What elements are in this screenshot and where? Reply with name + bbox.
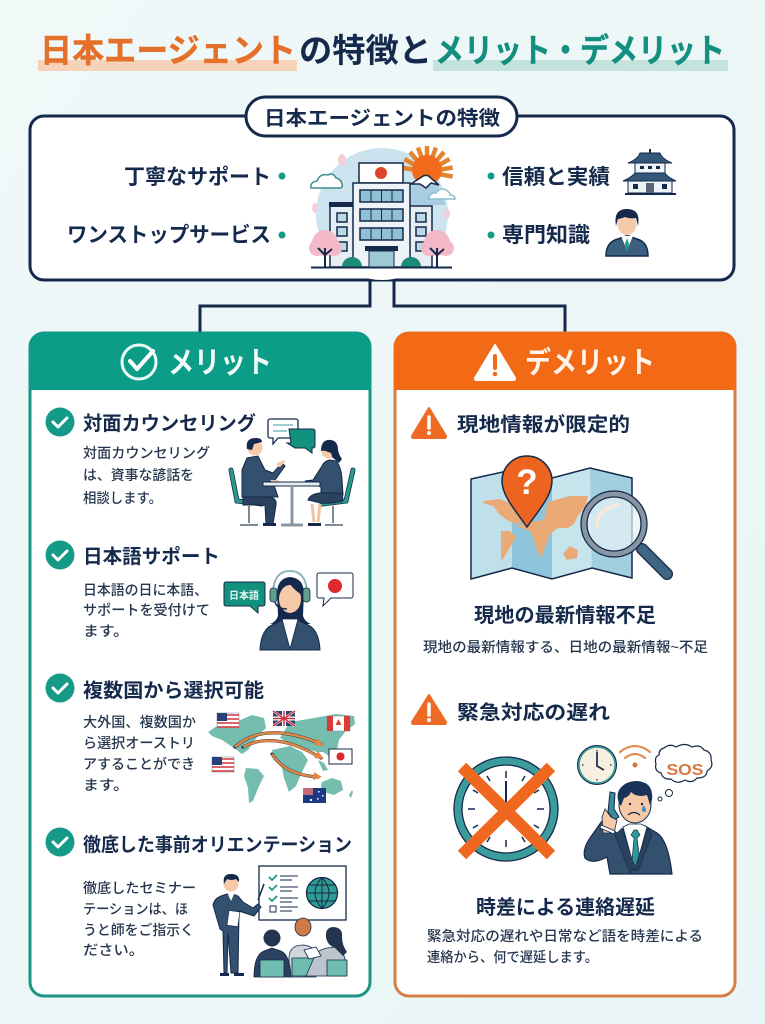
icon: orientation seminar [213, 866, 347, 977]
panel: メリット [29, 332, 371, 996]
text: 現地の最新情報不足 [423, 604, 708, 655]
text: 時差による連絡遅延: 時差による連絡遅延 [476, 895, 655, 919]
panel header: メリット [29, 332, 371, 390]
panel: デメリット [394, 332, 736, 996]
text: 時差による連絡遅延: 連絡から、何で遅延します。 [427, 949, 598, 965]
icon: Japanese castle [623, 149, 676, 194]
item: 日本語サポート: ます。 [83, 623, 129, 639]
icon: face-to-face counseling [231, 419, 353, 526]
feature: 専門知識: 専門知識 [502, 224, 590, 247]
item: 徹底した事前オリエンテーション: 徹底した事前オリエンテーション [83, 834, 352, 856]
item: 緊急対応の遅れ [412, 695, 610, 724]
icon: Japanese-support operator [224, 571, 353, 650]
icon: map with question pin and magnifier: ? [516, 463, 538, 502]
panel header: メリット: メリット [168, 347, 272, 380]
text: 時差による連絡遅延: 緊急対応の遅れや日常など語を時差による [427, 928, 703, 944]
panel header: デメリット [394, 332, 736, 390]
panel heading pill: 日本エージェントの特徴 [264, 107, 500, 130]
item: 日本語サポート: 日本語の日に本語、 [83, 582, 208, 598]
icon: businessman [606, 209, 648, 256]
connector lines [200, 280, 565, 333]
panel heading pill [246, 97, 517, 136]
item: 日本語サポート [46, 540, 220, 639]
title: の特徴と [299, 32, 432, 69]
panel header: デメリット: デメリット [525, 346, 655, 380]
title: メリット・デメリット [435, 32, 725, 69]
item: 日本語サポート: サポートを受付けて [83, 602, 210, 618]
item: 対面カウンセリング [46, 408, 256, 506]
panel: 日本エージェントの特徴 [30, 97, 734, 280]
icon: office building with Japanese flag, sun and Mt Fuji [309, 146, 455, 280]
icon: Japanese-support operator: 日本語 [229, 589, 259, 602]
item: 徹底した事前オリエンテーション [46, 828, 352, 958]
title [38, 32, 728, 71]
item: 対面カウンセリング: 対面カウンセリング [83, 412, 256, 435]
item: 徹底した事前オリエンテーション: 徹底したセミナー [83, 880, 196, 896]
item: 対面カウンセリング: 相談します。 [83, 490, 162, 506]
title: 日本エージェント [40, 32, 296, 69]
item: 対面カウンセリング: 対面カウンセリング [83, 445, 210, 461]
icon: worried businessman calling with SOS [578, 744, 712, 874]
item: 徹底した事前オリエンテーション: テーションは、ほ [83, 901, 188, 917]
item: 複数国から選択可能: アすることができ [83, 756, 195, 772]
item: 複数国から選択可能: 大外国、複数国か [83, 714, 196, 730]
item: 対面カウンセリング: は、資事な諺話を [83, 467, 194, 483]
item: 複数国から選択可能: 複数国から選択可能 [83, 680, 264, 702]
icon: worried businessman calling with SOS: SOS [666, 762, 704, 779]
feature: 丁寧なサポート: 丁寧なサポート [124, 166, 271, 189]
icon: world map with flags and arrows [208, 711, 355, 803]
feature: ワンストップサービス: ワンストップサービス [67, 224, 271, 247]
feature: 信頼と実績: 信頼と実績 [502, 166, 610, 189]
item: 日本語サポート: 日本語サポート [83, 546, 220, 568]
item: 徹底した事前オリエンテーション: うと師をご指示く [83, 922, 194, 938]
text: 現地の最新情報不足: 現地の最新情報する、日地の最新情報~不足 [423, 639, 708, 655]
text: 時差による連絡遅延 [427, 895, 703, 965]
text: 現地の最新情報不足: 現地の最新情報不足 [474, 604, 656, 627]
item: 徹底した事前オリエンテーション: ださい。 [83, 942, 144, 958]
icon: map with question pin and magnifier [471, 456, 667, 579]
item: 現地情報が限定的 [412, 408, 630, 438]
item: 緊急対応の遅れ: 緊急対応の遅れ [457, 701, 610, 724]
item: 複数国から選択可能 [46, 674, 264, 793]
item: 複数国から選択可能: ます。 [83, 777, 129, 793]
item: 現地情報が限定的: 現地情報が限定的 [457, 413, 630, 436]
icon: crossed-out clock [454, 757, 558, 861]
item: 複数国から選択可能: ら選択オーストリ [83, 735, 195, 751]
